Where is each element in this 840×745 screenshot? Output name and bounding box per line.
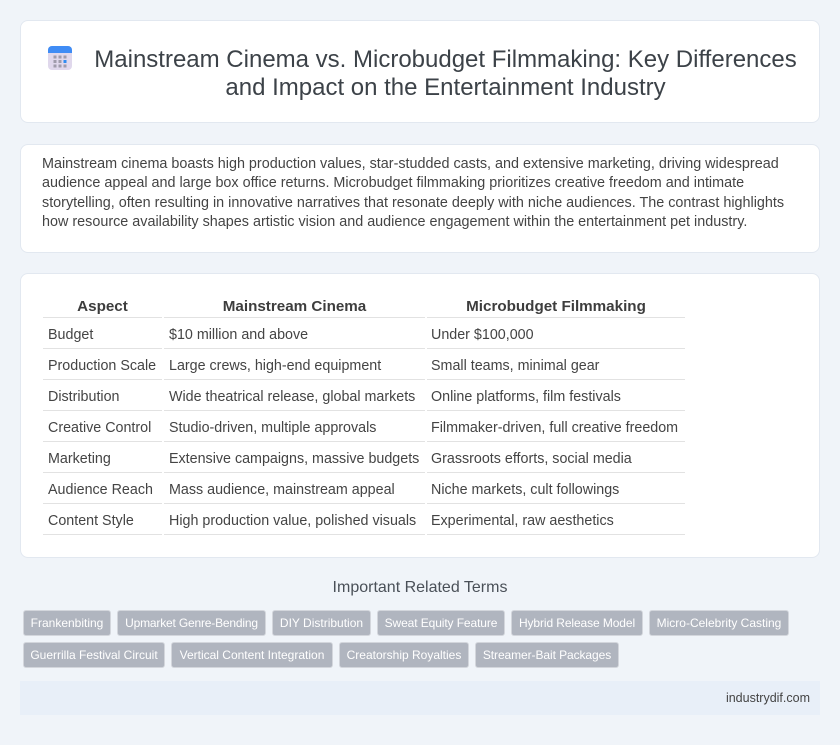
panel: comparison table: Grassroots efforts, social media	[431, 451, 632, 467]
intro text: how resource availability shapes artistic vision and audience engagement within the entertainment pet industry.	[42, 214, 747, 230]
row: marketing	[43, 451, 685, 473]
tag: Upmarket Genre-Bending	[125, 616, 258, 630]
tag	[511, 610, 643, 636]
row: audience reach	[43, 482, 685, 504]
panel: comparison table: Large crews, high-end equipment	[169, 358, 381, 374]
panel: comparison table: Production Scale	[48, 358, 156, 374]
tag: DIY Distribution	[280, 616, 363, 630]
intro text: audience appeal and large box office returns. Microbudget filmmaking prioritizes creative freedom and intimate	[42, 175, 744, 191]
tag: Creatorship Royalties	[347, 648, 461, 662]
row: production scale	[43, 358, 685, 380]
panel: introduction	[20, 144, 820, 253]
intro text: Mainstream cinema boasts high production values, star-studded casts, and extensive marketing, driving widespread	[42, 156, 779, 172]
tag: Micro-Celebrity Casting	[657, 616, 781, 630]
heading: related terms: Important Related Terms	[333, 579, 507, 596]
tag	[23, 642, 165, 668]
row: creative control	[43, 420, 685, 442]
panel: comparison table	[20, 273, 820, 558]
tag	[339, 642, 469, 668]
tag: Frankenbiting	[31, 616, 103, 630]
tag	[117, 610, 266, 636]
panel: comparison table: Creative Control	[48, 420, 151, 436]
panel: comparison table: Mass audience, mainstream appeal	[169, 482, 395, 498]
table header	[43, 298, 685, 318]
panel: comparison table: Distribution	[48, 389, 120, 405]
panel: comparison table: Mainstream Cinema	[223, 298, 366, 315]
panel: comparison table: Budget	[48, 327, 93, 343]
panel: comparison table: Filmmaker-driven, full creative freedom	[431, 420, 678, 436]
tag: Guerrilla Festival Circuit	[30, 648, 158, 662]
panel: comparison table: Online platforms, film festivals	[431, 389, 621, 405]
related term tags	[23, 610, 789, 668]
panel: comparison table: Content Style	[48, 513, 134, 529]
panel: comparison table: Audience Reach	[48, 482, 153, 498]
icon: calendar	[48, 46, 72, 70]
panel: comparison table: High production value, polished visuals	[169, 513, 416, 529]
panel: title header	[20, 20, 820, 123]
footer bar	[20, 681, 820, 715]
tag	[272, 610, 371, 636]
panel: comparison table: Small teams, minimal gear	[431, 358, 599, 374]
row: budget	[43, 327, 685, 349]
title	[94, 46, 797, 101]
panel: comparison table: $10 million and above	[169, 327, 308, 343]
panel: comparison table: Under $100,000	[431, 327, 534, 343]
tag	[23, 610, 111, 636]
intro text	[42, 156, 784, 230]
panel: comparison table: Wide theatrical release, global markets	[169, 389, 415, 405]
title: and Impact on the Entertainment Industry	[225, 74, 666, 101]
tag: Streamer-Bait Packages	[483, 648, 611, 662]
panel: comparison table: Extensive campaigns, massive budgets	[169, 451, 419, 467]
tag	[649, 610, 789, 636]
footer text: site name: industrydif.com	[726, 691, 810, 705]
intro text: storytelling, often resulting in innovative narratives that resonate deeply with niche audiences. The contrast highlights	[42, 195, 784, 211]
panel: comparison table: Marketing	[48, 451, 111, 467]
tag	[377, 610, 505, 636]
panel: comparison table: Studio-driven, multiple approvals	[169, 420, 376, 436]
tag: Hybrid Release Model	[519, 616, 635, 630]
row: content style	[43, 513, 685, 535]
panel: comparison table: Experimental, raw aesthetics	[431, 513, 614, 529]
panel: comparison table: Microbudget Filmmaking	[466, 298, 646, 315]
tag	[171, 642, 333, 668]
panel: comparison table: Aspect	[77, 298, 128, 315]
tag	[475, 642, 619, 668]
title: Mainstream Cinema vs. Microbudget Filmmaking: Key Differences	[94, 46, 797, 73]
tag: Sweat Equity Feature	[385, 616, 497, 630]
panel: comparison table: Niche markets, cult followings	[431, 482, 619, 498]
tag: Vertical Content Integration	[180, 648, 324, 662]
row: distribution	[43, 389, 685, 411]
